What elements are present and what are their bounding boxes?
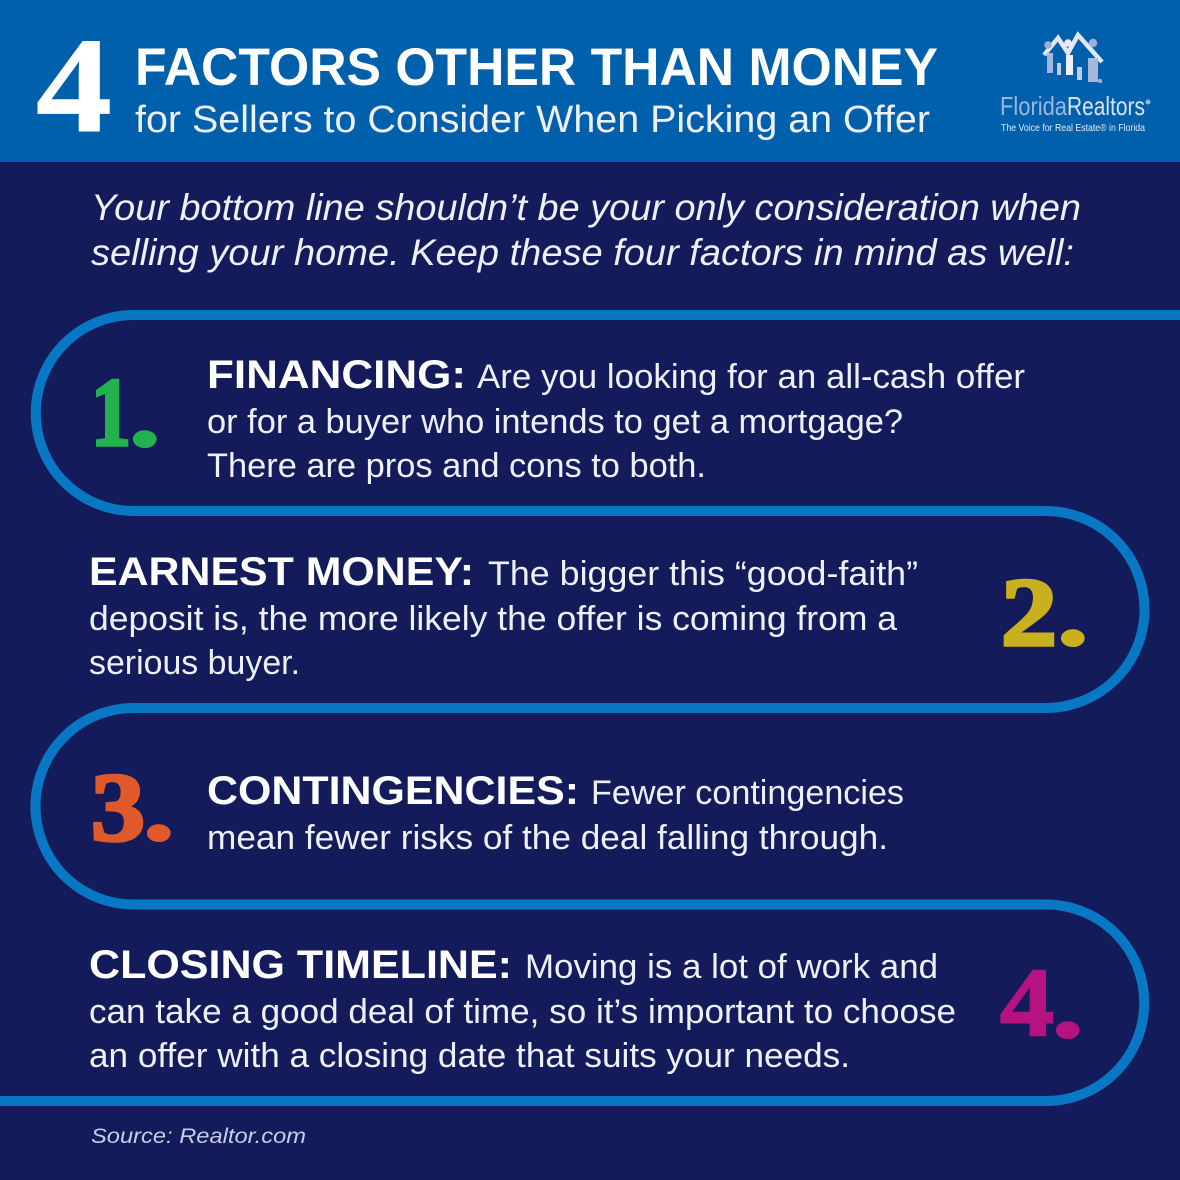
factor 3 text: mean fewer risks of the deal falling through. — [207, 819, 888, 857]
numeral 2: 2 — [1001, 559, 1057, 666]
numeral 3 — [91, 743, 177, 864]
factor 2 text: deposit is, the more likely the offer is coming from a — [89, 600, 897, 638]
numeral 4 — [1000, 940, 1086, 1061]
factor 4 text: CLOSING TIMELINE: — [89, 943, 512, 987]
factor 1: financing — [91, 349, 1025, 485]
numeral 4: . — [1050, 940, 1086, 1061]
factor 2 text — [89, 550, 918, 682]
factor 3: contingencies — [91, 743, 904, 864]
winding path line — [0, 315, 1180, 1101]
factor 3 text: Fewer contingencies — [591, 774, 904, 812]
factor 1 text: or for a buyer who intends to get a mortgage? — [207, 403, 903, 441]
numeral 1 — [91, 349, 163, 470]
header banner — [0, 0, 1180, 162]
intro text: selling your home. Keep these four factors in mind as well: — [91, 232, 1074, 273]
factor 4 text: Moving is a lot of work and — [525, 948, 938, 986]
factor 2 text: EARNEST MONEY: — [89, 550, 474, 594]
logo: Florida Realtors — [1000, 35, 1150, 134]
numeral 3: . — [140, 743, 177, 864]
intro text: Your bottom line shouldn’t be your only consideration when — [91, 187, 1081, 228]
factor 4 text: can take a good deal of time, so it’s important to choose — [89, 993, 956, 1031]
factor 4: closing timeline — [89, 940, 1086, 1075]
title: FACTORS OTHER THAN MONEY — [135, 38, 938, 97]
logo tagline: The Voice for Real Estate® in Florida — [1001, 122, 1145, 134]
numeral 1: . — [126, 349, 163, 470]
numeral 3: 3 — [91, 754, 145, 861]
icon: houses and people — [1044, 35, 1102, 83]
factor 1 text: Are you looking for an all-cash offer — [477, 358, 1025, 396]
numeral 1: 1 — [91, 359, 131, 466]
factor 1 text — [207, 353, 1025, 485]
logo wordmark: Florida — [1000, 91, 1067, 121]
numeral 2: . — [1054, 548, 1091, 669]
factor 4 text: an offer with a closing date that suits your needs. — [89, 1037, 850, 1075]
numeral 2 — [1001, 548, 1091, 669]
factor 4 text — [89, 943, 956, 1075]
big numeral 4: 4 — [36, 11, 112, 161]
factor 1 text: FINANCING: — [207, 353, 466, 397]
logo: Florida Realtors: Realtors — [1067, 91, 1145, 121]
intro text — [91, 187, 1081, 273]
factor 1 text: There are pros and cons to both. — [207, 447, 706, 485]
factor 3 text — [207, 769, 904, 857]
subtitle: for Sellers to Consider When Picking an Offer — [135, 99, 930, 141]
factor 2 text: The bigger this “good-faith” — [488, 555, 918, 593]
factor 2 text: serious buyer. — [89, 644, 300, 682]
factor 3 text: CONTINGENCIES: — [207, 769, 579, 813]
numeral 4: 4 — [1000, 949, 1054, 1056]
factor 2: earnest money — [89, 548, 1091, 682]
source note: Source: Realtor.com — [91, 1125, 306, 1148]
